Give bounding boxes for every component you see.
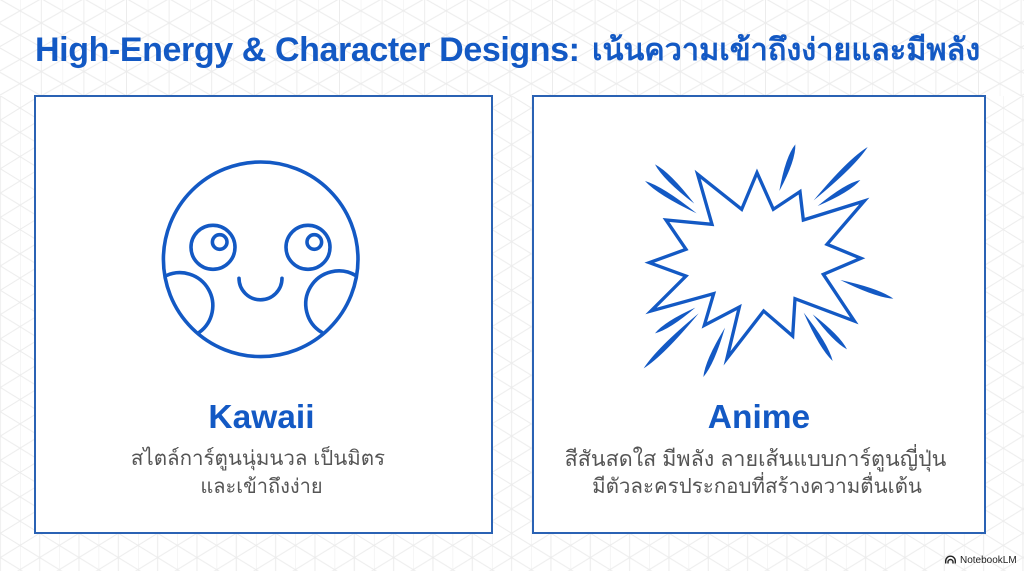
wordmark: NotebookLM (960, 555, 1017, 566)
heading: Anime: Anime (708, 399, 810, 436)
panel: Kawaii (34, 95, 493, 534)
title: High-Energy & Character Designs: (35, 31, 580, 69)
icon: comic burst (644, 144, 894, 377)
icon: NotebookLM mark (945, 556, 956, 564)
heading: Kawaii: Kawaii (208, 399, 315, 436)
description: Kawaii (131, 446, 385, 498)
description: Kawaii: และเข้าถึงง่าย (200, 476, 323, 498)
description: Anime: มีตัวละครประกอบที่สร้างความตื่นเต้น (592, 475, 922, 498)
icon: kawaii face (162, 160, 360, 358)
title: เน้นความเข้าถึงง่ายและมีพลัง (592, 33, 980, 67)
title (35, 31, 980, 69)
description: Anime (565, 444, 946, 498)
description: Anime: สีสันสดใส มีพลัง ลายเส้นแบบการ์ตูนญี่ปุ่น (565, 447, 946, 471)
description: Kawaii: สไตล์การ์ตูนนุ่มนวล เป็นมิตร (131, 447, 385, 470)
logo: NotebookLM (945, 555, 1017, 566)
panel: Anime (532, 95, 986, 534)
